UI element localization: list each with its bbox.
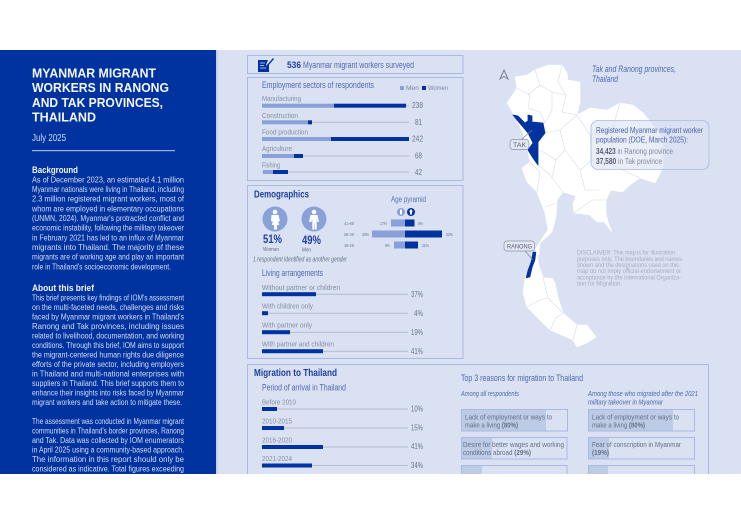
text block: background: 2.3 million registered migrant workers, most of [32, 195, 185, 204]
label: Tak: TAK [513, 143, 526, 149]
reason: lack of employment [462, 410, 568, 431]
stat: women [263, 232, 282, 253]
text block: background: whom are employed in elementary occupations [31, 204, 184, 213]
text block: about this brief: This brief presents key findings of IOM's assessment [32, 293, 185, 302]
text block: methodology: The assessment was conducted in Myanmar migrant [32, 417, 185, 426]
text block: about this brief: conditions. Through this brief, IOM aims to support [32, 341, 185, 350]
province: Tak [513, 115, 545, 165]
bar chart: period of arrival: 10% [411, 404, 423, 414]
stat: men [302, 233, 321, 254]
reason: lack of employment: Lack of employment or ways to [592, 412, 679, 422]
panel: left intro sidebar [0, 50, 216, 474]
text block: about this brief: enhance their insights into risks faced by Myanmar [32, 388, 184, 398]
text block: methodology: and Tak. Data was collected by IOM enumerators [32, 436, 184, 445]
text block: background: As of December 2023, an estimated 4.1 million [32, 175, 184, 184]
label: Ranong: RANONG [507, 244, 532, 250]
reason: third, cropped [462, 466, 567, 474]
legend [400, 85, 448, 92]
date: July 2025 [32, 132, 66, 144]
text block: background: migrants into Thailand. The majority of these [32, 243, 185, 252]
text block: methodology [32, 417, 185, 474]
column: migrated after 2021: Among those who migrated after the 2021 [587, 391, 698, 398]
bar chart: living arrangements: Without partner or children [262, 283, 340, 292]
column: migrated after 2021 [587, 391, 698, 474]
bar chart: period of arrival: Before 2010 [262, 398, 296, 406]
bar chart: living arrangements: 4% [414, 309, 423, 318]
bar chart: living arrangements [262, 283, 423, 356]
reason: better wages [462, 438, 567, 459]
callout: registered migrant population: 34,423 in Ranong province [596, 147, 673, 156]
bar chart: living arrangements: With partner and children [262, 340, 334, 348]
panel: demographics [248, 186, 463, 358]
text block: about this brief: Ranong and Tak provinces, including issues [32, 322, 184, 331]
stat: women: Women [263, 247, 279, 253]
text block: background: migrants are of working age and play an important [32, 253, 185, 262]
bar chart: period of arrival: 2010-2015 [262, 416, 292, 426]
legend: Men [406, 85, 419, 92]
reason: lack of employment: Lack of employment or ways to [465, 412, 552, 422]
bar chart: living arrangements: 19% [411, 328, 423, 337]
text block: methodology: communities in Thailand's border provinces, Ranong [32, 427, 184, 436]
bar chart: period of arrival: 34% [411, 461, 423, 470]
text block: methodology: considered as indicative. Total figures exceeding [32, 465, 184, 474]
bar chart: living arrangements: With children only [262, 302, 313, 310]
text block: disclaimer: map do not imply official endorsement or [577, 269, 681, 275]
title [32, 65, 169, 125]
reason: third, cropped [588, 466, 694, 474]
survey label: Myanmar migrant workers surveyed [303, 60, 414, 70]
text block: background: in February 2021 has led to an influx of Myanmar [32, 233, 184, 242]
heading: demographics: Demographics [254, 190, 309, 200]
heading: living arrangements: Living arrangements [262, 268, 323, 278]
text block: disclaimer: acceptance by the International Organiza- [577, 275, 681, 281]
chart: age pyramid: 18-25 [344, 243, 354, 248]
bar chart: employment sectors: 242 [412, 134, 423, 144]
reason: fear of conscription [588, 438, 694, 459]
bar chart: living arrangements: 41% [411, 347, 423, 356]
text block: about this brief: related to livelihood, documentation, and working [32, 332, 184, 340]
text block: about this brief [32, 293, 185, 407]
chart: age pyramid: 9% [385, 243, 390, 248]
heading: about this brief: About this brief [32, 283, 95, 293]
text block: about this brief: efforts of the private sector, including employers [32, 360, 184, 369]
stat: women: 51% [263, 232, 282, 246]
icon: woman [262, 206, 288, 232]
text block: disclaimer: DISCLAIMER: This map is for illustration [577, 251, 675, 257]
icon: man [302, 206, 326, 232]
text block: disclaimer: shown and the designations used on this [577, 263, 679, 269]
bar chart: period of arrival: 15% [411, 424, 423, 432]
text block: background: (UNMN, 2024). Myanmar's protracted conflict and [32, 214, 184, 223]
bar chart: employment sectors: Agriculture [262, 144, 292, 153]
bar chart: employment sectors: 238 [412, 101, 423, 110]
callout: registered migrant population: Registered Myanmar migrant worker [596, 125, 703, 135]
reason: lack of employment [588, 410, 694, 431]
chart: age pyramid: 11% [422, 243, 429, 248]
heading: background: Background [32, 165, 78, 175]
text block: methodology: in April 2025 using a community-based approach. [32, 446, 184, 455]
province: Ranong [526, 252, 536, 278]
title: MYANMAR MIGRANT [32, 65, 156, 80]
chart: age pyramid: 30% [362, 232, 369, 237]
chart: age pyramid: 41-60 [344, 221, 354, 226]
text block: methodology: The information in this report should only be [32, 455, 185, 464]
panel: employment sectors [248, 78, 463, 180]
reason: better wages: Desire for better wages and working [463, 440, 564, 449]
stat: men: 49% [302, 233, 321, 247]
chart: age pyramid: 26-40 [344, 232, 354, 237]
reason: lack of employment: make a living (80%) [465, 420, 518, 430]
bar chart: living arrangements: With partner only [262, 320, 312, 330]
text block: about this brief: suppliers in Thailand. This brief supports them to [32, 379, 184, 388]
map: Thailand provinces [500, 65, 663, 347]
bar chart: period of arrival [262, 398, 423, 470]
title: AND TAK PROVINCES, [32, 95, 163, 110]
title: THAILAND [32, 110, 96, 125]
reason: lack of employment: make a living (80%) [592, 420, 645, 430]
chart: age pyramid: 8% [418, 221, 423, 226]
heading: employment sectors: Employment sectors of respondents [262, 80, 374, 90]
bar chart: living arrangements: 37% [411, 290, 423, 299]
bar chart: period of arrival: 41% [411, 442, 423, 451]
callout: registered migrant population: population (DOE, March 2025): [596, 134, 688, 144]
panel: migration to Thailand [248, 364, 708, 474]
text block: background: role in Thailand's socioeconomic development. [32, 262, 171, 272]
bar chart: employment sectors: Fishing [262, 160, 280, 170]
survey count: 536 [287, 60, 301, 71]
text block: disclaimer: tion for Migration. [577, 282, 622, 288]
bar chart: employment sectors: Construction [262, 111, 298, 120]
reason: fear of conscription: Fear of conscription in Myanmar [592, 440, 681, 449]
bar chart: employment sectors [262, 94, 423, 177]
bar chart: period of arrival: 2016-2020 [262, 436, 292, 444]
panel: respondents surveyed [248, 56, 463, 74]
bar chart: employment sectors: Food production [262, 128, 308, 136]
map heading: Thailand [592, 74, 619, 84]
bar chart: period of arrival: 2021-2024 [262, 454, 292, 463]
text block: background: economic instability, following the military takeover [32, 224, 184, 233]
label: Tak [510, 130, 532, 150]
reason: fear of conscription: (19%) [592, 448, 609, 457]
callout: registered migrant population: 37,580 in Tak province [596, 157, 662, 166]
text block: disclaimer [577, 251, 682, 288]
icon: north arrow [500, 70, 508, 79]
icon: survey form and pen [258, 58, 274, 72]
heading: period of arrival: Period of arrival in Thailand [262, 382, 346, 392]
title: WORKERS IN RANONG [32, 80, 169, 95]
column: migrated after 2021: military takeover in Myanmar [588, 400, 664, 406]
stat: men: Men [302, 248, 311, 254]
bar chart: employment sectors: 68 [415, 152, 422, 160]
bar chart: employment sectors: 81 [415, 118, 422, 127]
reason: better wages: conditions abroad (29%) [463, 448, 531, 457]
chart: age pyramid: 17% [380, 221, 387, 226]
column: all respondents: Among all respondents [460, 391, 519, 398]
heading: top reasons: Top 3 reasons for migration to Thailand [461, 373, 583, 383]
map heading: Tak and Ranong provinces, [592, 64, 676, 74]
bar chart: employment sectors: 42 [415, 168, 422, 177]
callout: registered migrant population [591, 120, 709, 170]
chart: age pyramid [344, 195, 453, 248]
map heading [592, 64, 676, 84]
text block: disclaimer: purposes only. The boundaries and names [577, 257, 682, 263]
chart: age pyramid: 32% [446, 232, 453, 237]
chart: age pyramid: Age pyramid [391, 195, 426, 204]
bar chart: employment sectors: Manufacturing [262, 94, 301, 103]
legend: Women [428, 85, 448, 92]
text block: about this brief: migrant workers and take action to mitigate these. [32, 398, 182, 407]
text block: about this brief: faced by Myanmar migrant workers in Thailand's [32, 312, 184, 321]
text block: about this brief: the migrant-centered human rights due diligence [32, 350, 184, 360]
text block: background: Myanmar nationals were living in Thailand, including [32, 185, 184, 194]
label: Ranong [504, 241, 534, 260]
note: another gender: 1 respondent identified as another gender [253, 256, 347, 264]
text block: about this brief: in Thailand and multi-national enterprises with [32, 370, 184, 378]
heading: migration to Thailand: Migration to Thailand [254, 368, 337, 379]
text block: about this brief: on the multi-faceted needs, challenges and risks [32, 303, 184, 312]
column: all respondents [460, 391, 568, 474]
text block: background [31, 175, 185, 272]
